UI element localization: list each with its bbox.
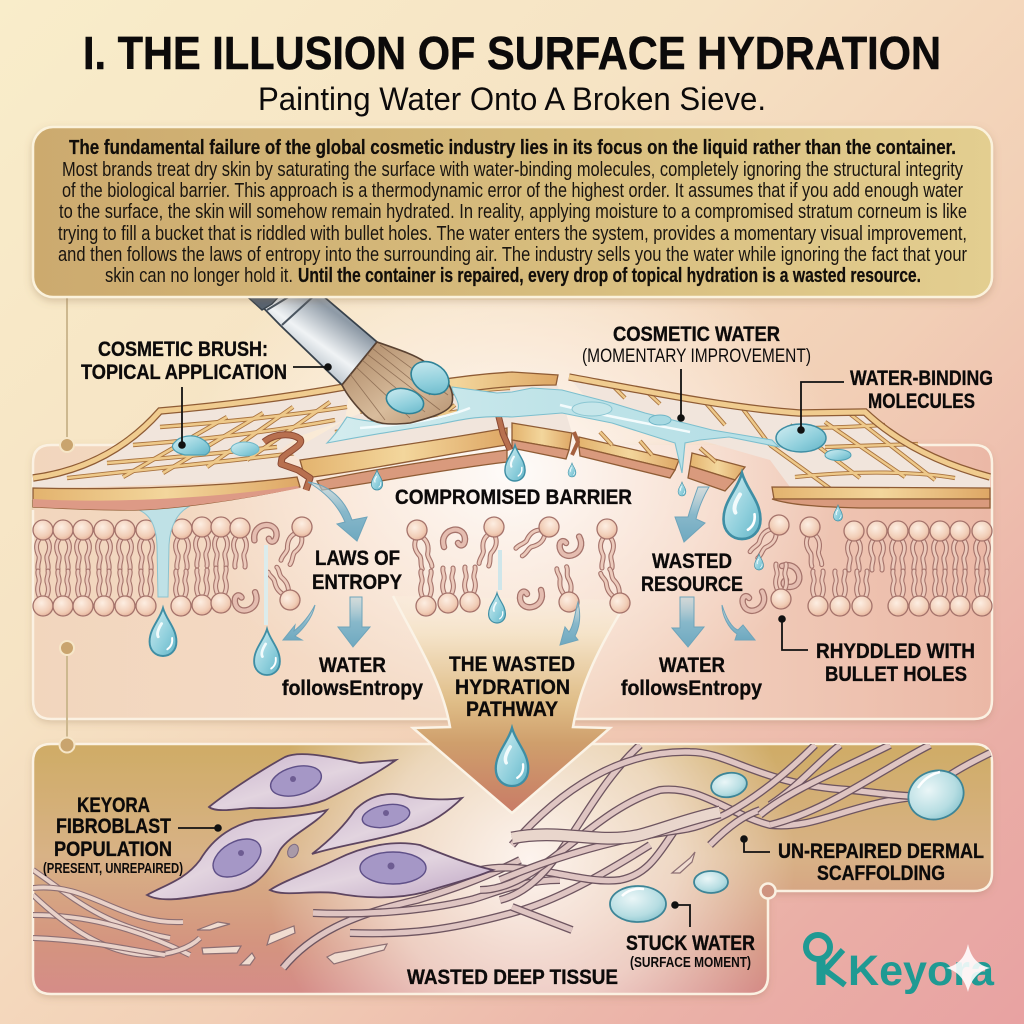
- brush: [240, 290, 453, 424]
- label: water follows entropy left: WATER: [319, 653, 386, 677]
- callout: fibroblast population: (PRESENT, UNREPAIRED): [43, 861, 183, 877]
- label: wasted hydration pathway: [449, 652, 575, 721]
- callout: cosmetic brush: [81, 337, 332, 449]
- callout: cosmetic water: (MOMENTARY IMPROVEMENT): [582, 346, 811, 367]
- water leak through membrane: [133, 506, 500, 625]
- label: laws of entropy: LAWS OF: [315, 546, 400, 570]
- callout: fibroblast population: FIBROBLAST: [56, 814, 171, 838]
- callout: cosmetic water: [582, 322, 811, 422]
- title: I. THE ILLUSION OF SURFACE HYDRATION: [83, 27, 941, 79]
- callout: dermal scaffolding: UN-REPAIRED DERMAL: [778, 839, 984, 863]
- label: laws of entropy: ENTROPY: [312, 570, 402, 594]
- label: wasted hydration pathway: HYDRATION: [455, 675, 570, 699]
- callout: stuck water: (SURFACE MOMENT): [630, 955, 751, 971]
- central light glow: [130, 300, 910, 720]
- label: wasted resource: WASTED: [652, 549, 732, 573]
- body text lines: [58, 137, 967, 287]
- label: wasted deep tissue: WASTED DEEP TISSUE: [407, 965, 618, 989]
- callout: dermal scaffolding: [740, 835, 984, 885]
- body text lines: skin can no longer hold it.: [105, 265, 293, 287]
- left barrier grid: [33, 386, 350, 510]
- falling water drops: [150, 445, 842, 675]
- connector: top panel to middle panel: [66, 297, 68, 445]
- fibroblast cells: [147, 754, 493, 899]
- label: water follows entropy right: followsEntropy: [621, 676, 762, 700]
- subtitle: Painting Water Onto A Broken Sieve.: [258, 81, 766, 117]
- callout: water-binding molecules: MOLECULES: [868, 389, 975, 413]
- label: water follows entropy left: [282, 653, 423, 700]
- panel: dermal tissue: [33, 744, 992, 994]
- label: laws of entropy: [312, 546, 402, 594]
- cell 3: [312, 794, 462, 854]
- icon: sparkle: [946, 944, 990, 992]
- water beads in dermis: [610, 763, 971, 922]
- broken lipids: right: [741, 511, 827, 612]
- callout: bullet holes: BULLET HOLES: [825, 662, 967, 686]
- brush ferrule: [246, 290, 377, 385]
- label: water follows entropy right: WATER: [659, 653, 725, 677]
- ferrule ring: [267, 290, 316, 325]
- label: wasted hydration pathway: THE WASTED: [449, 652, 575, 676]
- label: water follows entropy right: [621, 653, 762, 700]
- brush handle: [240, 290, 285, 310]
- callout: water-binding molecules: WATER-BINDING: [850, 366, 993, 390]
- water beads on brush and barrier: [172, 355, 851, 460]
- callout: bullet holes: [778, 615, 975, 686]
- dermal scaffolding fibers: [283, 745, 992, 968]
- callout: bullet holes: RHYDDLED WITH: [816, 639, 975, 663]
- logo: Keyora: [806, 935, 995, 995]
- centre barrier fragments: [290, 372, 745, 491]
- callout: water-binding molecules: [797, 366, 993, 434]
- lipid row: upper left: [33, 517, 250, 569]
- panel: compromised barrier: [33, 445, 992, 719]
- icon: key: [806, 935, 845, 985]
- right barrier grid: [569, 377, 990, 508]
- cracks: [264, 397, 578, 490]
- callout: cosmetic brush: COSMETIC BRUSH:: [98, 337, 268, 361]
- callout: stuck water: [626, 901, 755, 971]
- label: wasted hydration pathway: PATHWAY: [466, 697, 558, 721]
- callout: fibroblast population: KEYORA: [77, 793, 150, 817]
- lipid row: lower left: [33, 568, 231, 616]
- cell 1: [209, 754, 396, 810]
- label: compromised barrier: COMPROMISED BARRIER: [395, 485, 632, 509]
- callout: cosmetic water: COSMETIC WATER: [613, 322, 780, 346]
- left collagen fibers: [33, 852, 695, 965]
- callout: cosmetic brush: TOPICAL APPLICATION: [81, 360, 287, 384]
- cell 2: [147, 810, 327, 899]
- skin barrier: stratum corneum: [33, 372, 990, 510]
- label: wasted resource: [641, 549, 743, 596]
- broken fiber fragments: [197, 852, 695, 965]
- label: water follows entropy left: followsEntropy: [282, 676, 423, 700]
- callout: dermal scaffolding: SCAFFOLDING: [817, 861, 945, 885]
- label: wasted resource: RESOURCE: [641, 572, 743, 596]
- callout: fibroblast population: [43, 793, 222, 877]
- broken lipids: centre: [234, 513, 633, 616]
- connector nodes: [60, 438, 776, 898]
- lipid bilayer membrane: [33, 511, 992, 616]
- callout: fibroblast population: POPULATION: [54, 837, 172, 861]
- lipid rows: right: [808, 521, 992, 616]
- callout: stuck water: STUCK WATER: [626, 931, 755, 955]
- water sheet: cosmetic water: [327, 387, 779, 473]
- brush bristles: [342, 342, 453, 424]
- cell 4: [270, 843, 493, 897]
- flow arrows: [283, 482, 755, 647]
- logo: Keyora: Keyora: [848, 947, 995, 995]
- panel: body text: [33, 127, 992, 297]
- wasted hydration pathway arrow: [393, 596, 628, 813]
